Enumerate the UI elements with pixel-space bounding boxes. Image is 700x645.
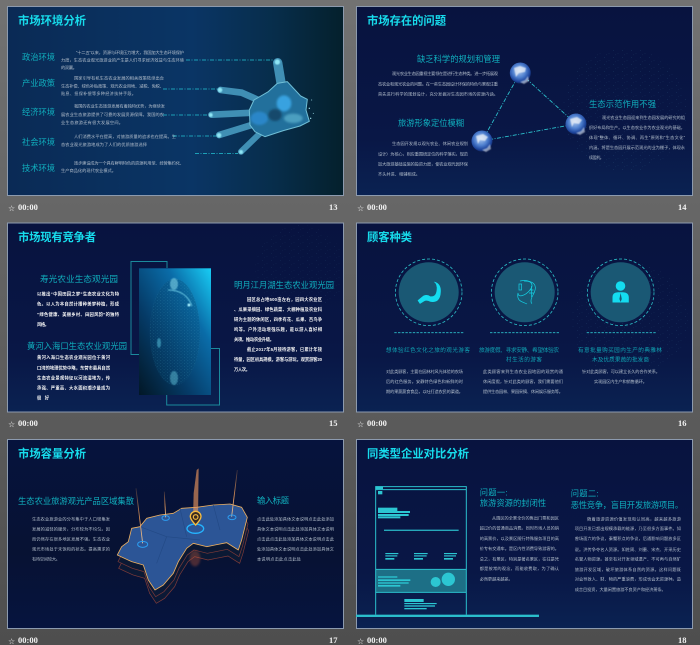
right text block: 本说明点击此点击此处 — [257, 556, 302, 562]
slide 16: customer types — [356, 223, 692, 429]
divider dashes — [394, 332, 656, 334]
icon: glowing hand — [209, 59, 314, 154]
footer — [8, 202, 338, 213]
problem 3: 体现“整体、循环、协调、再生”原则和“生态文化” — [589, 134, 686, 141]
customer type headings: 村生活的游客 — [506, 356, 542, 364]
left text block: 发展的减轻的服务，分布较为不均匀。因 — [32, 526, 110, 532]
category labels: 社会环境 — [22, 137, 55, 147]
competitor 3: 万人次。 — [234, 366, 250, 373]
competitor 2: 承强、严重高、大水面积潮汐量成为 — [37, 384, 110, 392]
problem 1: 缺乏科学的规划和管理 — [417, 54, 501, 64]
issue 1 — [480, 488, 560, 582]
issue 1: 必然更越来越差。 — [480, 575, 513, 582]
competitor 2: 黄河入海口生态农业观光园位于黄河 — [37, 354, 111, 361]
body text blocks: 人们消费水平在提高，对旅游质量的追求也在提高。生 — [74, 133, 176, 140]
left text block: 观光市场处于未饱和的状态。提高需求的 — [32, 546, 110, 552]
footer — [8, 635, 338, 645]
problem 2: 生态园开发规以观光农业、休闲农业规划 — [392, 140, 468, 147]
body text blocks: 力度，生态农业观光旅游业的产生是人们寻求经济效益与生态环境 — [61, 56, 184, 64]
competitor 3: 研为主题的休闲区，四季有花、瓜果、百鸟争 — [234, 316, 323, 323]
competitor 3: 明月江月湖生态农业观光园 — [234, 280, 334, 290]
competitor 2: 口湾的地理优势中略，东营市最具自然 — [37, 364, 111, 372]
decorative image frames — [131, 262, 220, 405]
icon: person with tie — [612, 281, 629, 302]
body text blocks: “十二五”以来，资源与环境压力增大，我国加大生态环境保护 — [76, 49, 184, 56]
problem 3: 生态示范作用不强 — [589, 99, 656, 109]
body text blocks: 展农业生态旅游提供了可靠的发展资源保障。我国的农 — [61, 111, 165, 118]
issue 2: 曾场面六的争议，秦蟹积点的争议，后通影响问题放多区 — [575, 535, 681, 542]
footer: ☆ — [357, 204, 364, 213]
slide 18: competitor comparison — [356, 440, 692, 645]
leader lines — [163, 60, 273, 154]
connecting triangle — [482, 73, 576, 141]
image: particle globe — [139, 268, 211, 395]
problem 1: 态农业和观光农业的问题。在一些生态园设计环保的特色与景观注重 — [378, 80, 498, 88]
competitor 3: 截止2017年5月接待游客，已累计年接 — [247, 346, 323, 353]
circles with dashed rings — [395, 259, 654, 326]
footer — [8, 418, 338, 429]
issue 1: 问题一: — [480, 488, 508, 498]
issue 2: 随着旅游资源价值发现和认同高，越来越多旅游 — [587, 515, 682, 522]
category labels: 技术环境 — [22, 163, 55, 173]
category labels: 产业政策 — [22, 78, 56, 88]
footer: 00:00 — [367, 635, 387, 645]
customer type headings: 旅游度假、寻求安静、希望体验农 — [479, 346, 559, 354]
problem 2: 齐头并进、相辅相成。 — [378, 170, 420, 178]
problem 3: 织好布局和生产。以生态农业作为农业观光的基础， — [589, 124, 685, 131]
competitor 2: 很好 — [37, 394, 50, 402]
customer descriptions: 提供生态园林、果园采摘、休闲娱乐服务等。 — [483, 388, 563, 395]
competitor 2: 黄河入海口生态农业观光园 — [27, 341, 127, 351]
competitor 3 — [234, 280, 334, 373]
customer descriptions: 期的果蔬蔬食食品，以吐打造农民的渠道。 — [386, 388, 463, 395]
body text blocks: 业生态旅游还有很大发展空间。 — [61, 119, 123, 126]
customer type headings — [386, 346, 662, 364]
icon: winding road with trees — [518, 281, 535, 304]
issue 2 — [571, 488, 683, 593]
body text blocks — [61, 49, 184, 174]
problem 3 — [589, 99, 686, 161]
problem 1 — [378, 54, 501, 98]
footer — [357, 202, 687, 213]
issue 1: 从園区的全景全价的售出门票和园区 — [492, 514, 559, 522]
issue 2: 对会导致人、财、物的严重浪费，形成也会无资源种。造 — [575, 576, 682, 583]
customer descriptions — [386, 368, 660, 395]
issue 2: 问题二: — [571, 488, 599, 498]
right text block: 具体文本说明点击此处添加具体文本说明 — [257, 526, 334, 532]
title: 顾客种类 — [367, 230, 412, 244]
customer descriptions: 此类顾客来到生态农业园地园的观赏的通 — [483, 368, 564, 375]
problem 1: 首先进行科学的规划设计，充分发掘对生态园市场的资源内涵。 — [378, 90, 498, 98]
category labels: 经济环境 — [22, 107, 55, 117]
body text blocks: 国家引导有机生态农业发展的相关政策陆续出台 — [74, 74, 164, 82]
competitor 3: 鸣等。户外活动增强乐趣，是以游人喜好相 — [234, 326, 323, 333]
competitor 1: 色。以人为本自然计播种美梦种植，形成 — [37, 300, 120, 308]
issue 2: 名誉人物资源。甚至有对开发领域遗产、不可再与自然矿 — [575, 556, 681, 563]
competitor 2: 生态农业景观特征以河流湿地为，传 — [37, 374, 111, 382]
body text blocks: 生产商品化的现代农业模式。 — [61, 167, 116, 174]
issue 1: 超过价的普通商品消费。同时市场人员的销 — [480, 524, 559, 532]
customer descriptions: 针对此类顾客，可以建立长久的合作关系。 — [582, 368, 660, 375]
slide 14: problems in the market — [356, 6, 692, 213]
problem 1: 观光农业生态园重视主要领在是进行生态种类。进一步拓展观 — [392, 70, 499, 77]
customer type headings: 想体验红色文化之旅的观光游客 — [386, 346, 470, 354]
footer: 13 — [329, 202, 338, 212]
footer: 00:00 — [367, 418, 387, 428]
footer: 15 — [329, 418, 338, 428]
icon: swoosh — [418, 282, 441, 304]
customer descriptions: 后的红色服务。安静特色绿色和新鲜的时 — [386, 378, 464, 385]
left text block: 生态农业旅游业的分布集中于人口密集发 — [32, 516, 111, 522]
competitor 1: 以推出“中国田园之梦”生态农业文化为特 — [37, 290, 120, 298]
right text block: 处添加具体文本说明点击此处添加具体文 — [257, 546, 335, 552]
left text block: 有待空间较大。 — [32, 556, 60, 562]
issue 1: 旅游资源的封闭性 — [480, 498, 546, 508]
title: 市场存在的问题 — [367, 14, 446, 28]
customer descriptions: 对此类顾客，主要在园林村风光体验的农场 — [386, 368, 463, 375]
left text block: 生态农业旅游观光产品区域集散 — [18, 496, 135, 506]
competitor 1: “绿色健康、美丽乡村、田园风韵”的独特 — [37, 311, 120, 318]
issue 1: 都是按常的观念，而能收费取，为了确认 — [480, 565, 560, 572]
map with pins — [117, 468, 249, 603]
issue 2: 恶性竞争，盲目开发旅游项目。 — [571, 500, 683, 510]
footer: 16 — [678, 418, 686, 428]
competitor 3: 、瓜果采摘园、绿色蔬菜、大棚种植及农业科 — [234, 306, 323, 313]
footer: ☆ — [357, 420, 364, 429]
issue 1: 总之，有景区，特别是著名景区，往往是凭 — [480, 555, 560, 562]
footer: 00:00 — [18, 635, 38, 645]
competitor 3: 园区总占地500亩左右，园四大农业区 — [247, 296, 323, 303]
body text blocks: 逐步建设成为一个具有鲜明特色的资源利用型、经营集约化、 — [74, 160, 184, 166]
problem 2 — [378, 118, 469, 178]
customer descriptions: 休闲度假，针对此类的顾客，我们需要他们 — [483, 378, 563, 385]
competitor 2 — [27, 341, 127, 402]
problem 3: 续盈利。 — [589, 154, 604, 161]
left text block — [18, 496, 135, 562]
problem 2: 旅游形象定位模糊 — [398, 118, 464, 128]
customer type headings: 有意批量购买园内生产的典雅林 — [578, 346, 662, 354]
issue 2: 说。洪传争夺名人资源。如姓周、刘墨、宋杰、开采历史 — [575, 546, 682, 553]
right text block: 输入标题 — [257, 496, 289, 506]
category labels: 政治环境 — [22, 52, 55, 62]
slide 15: existing competitors — [8, 223, 345, 429]
body text blocks: 贴息、担保补偿等多种经济扶持手段。 — [61, 90, 136, 97]
left text block: 而仍然存在很多地区发展不强。生态农业 — [32, 536, 110, 542]
footer: 14 — [678, 202, 687, 212]
footer — [357, 635, 686, 645]
wireframe illustration — [356, 486, 539, 617]
footer: ☆ — [8, 204, 15, 213]
footer: 00:00 — [18, 202, 38, 212]
body text blocks: 生态补偿、绿色补贴政策、观光农业用地、减税、免税、 — [61, 82, 164, 90]
competitor 1 — [37, 273, 120, 328]
body text blocks: 的双赢。 — [61, 64, 77, 71]
body text blocks: 我国的农业生态旅游发展有着独特优势，为继续发 — [74, 102, 166, 110]
issue 2: 成言目投资，大量闲置旅游不良资产和经济萧条。 — [575, 586, 666, 593]
right text block — [257, 496, 335, 562]
competitor 3: 关项。推动农业升级。 — [234, 336, 274, 343]
issue 1: 的高票价，以及景区随行特殊服务项目的高 — [480, 535, 559, 542]
title: 市场容量分析 — [18, 446, 86, 460]
footer: 18 — [678, 635, 686, 645]
issue 1: 价专有交通车。是区内性消费导致游客的。 — [480, 545, 559, 552]
category labels — [22, 52, 56, 173]
competitor 3: 待量，园区初具规模，游客与游玩，观赏游客20 — [234, 356, 323, 363]
title: 市场现有竞争者 — [18, 230, 96, 244]
title: 市场环境分析 — [18, 14, 86, 28]
globes — [472, 62, 586, 152]
issue 2: 旅游开发区域，破坏旅游体系自然的资源。这样问题既 — [575, 566, 681, 573]
footer: 00:00 — [18, 418, 38, 428]
competitor 1: 寿光农业生态观光园 — [40, 273, 118, 284]
footer — [357, 418, 686, 429]
right text block: 点击此点击此处添加具体文本说明点击此 — [257, 536, 335, 542]
body text blocks: 态农业观光旅游地成为了人们的优质旅游选择 — [61, 141, 148, 148]
problem 3: 观光农业生态园迎来到生态园发展的研究的组 — [602, 114, 685, 121]
customer descriptions: 实现园区内生产和销售循环。 — [594, 378, 647, 385]
problem 2: 加大旅游基础设施的投资力度，使农业观光园环保 — [378, 160, 469, 168]
customer type headings: 木及优质果蔬的批发商 — [592, 356, 649, 364]
title: 同类型企业对比分析 — [367, 446, 469, 460]
slide 17: market capacity analysis — [8, 440, 344, 645]
footer: ☆ — [8, 420, 15, 429]
slide 13: market environment analysis — [8, 6, 344, 213]
problem 3: 内涵。将是生态园开展示范观光的业为棚子，体现永 — [589, 144, 686, 151]
competitor 1: 风格。 — [37, 321, 49, 328]
footer: 17 — [329, 635, 338, 645]
footer: 00:00 — [367, 202, 387, 212]
issue 2: 项目开发已超出规模承载的能源，乃至很多方面事件。如 — [575, 525, 681, 532]
right text block: 点击此处添加具体文本说明点击此处添加 — [257, 516, 334, 522]
problem 2: 设计）为核心，则应重围绕定位的科学落实。规范 — [378, 150, 468, 158]
